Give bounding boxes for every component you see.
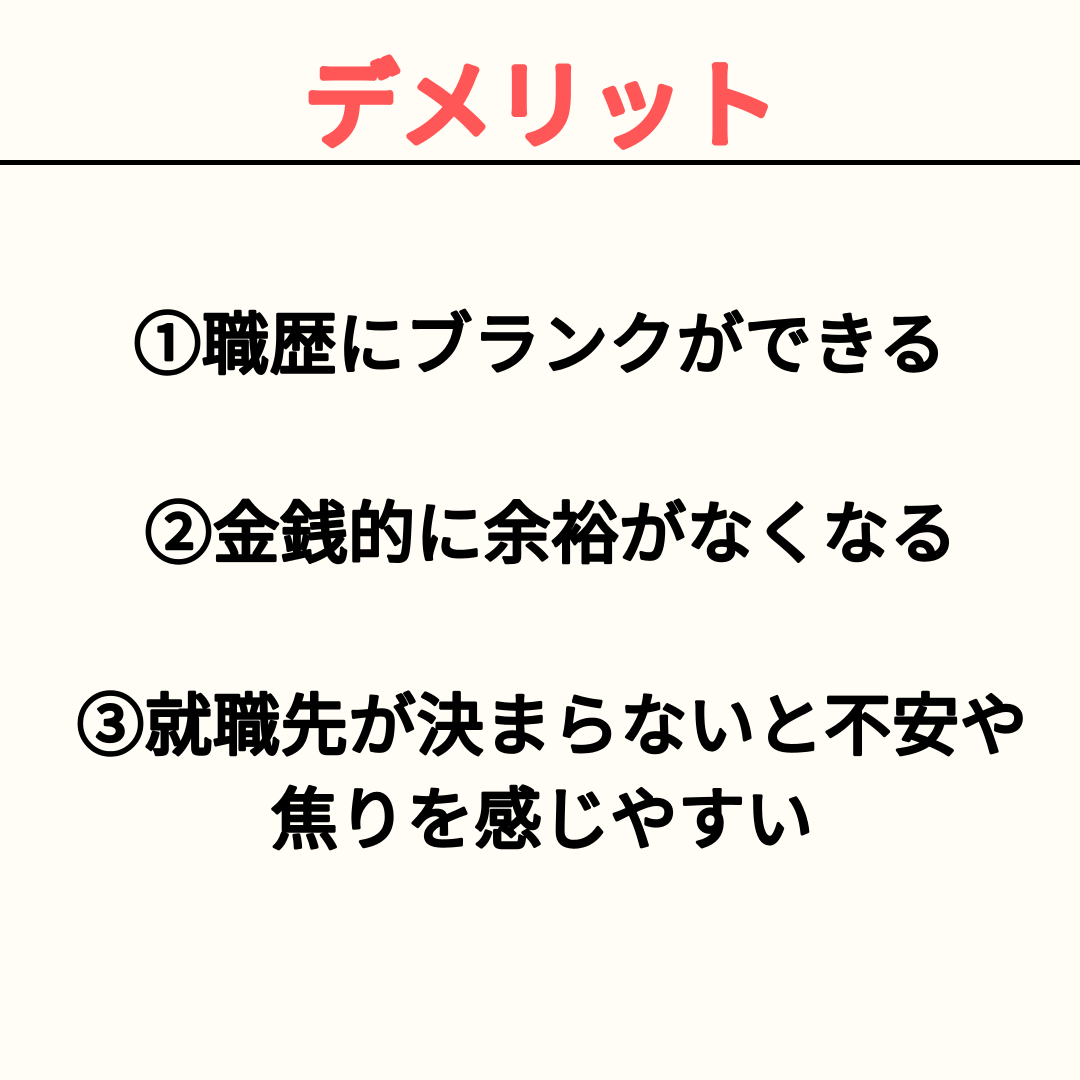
item 3: 焦りを感じやすい — [271, 783, 813, 858]
item 3: ③就職先が決まらないと不安や — [77, 689, 1027, 764]
item 1: ①職歴にブランクができる — [134, 308, 946, 383]
item 3 — [77, 689, 1027, 858]
divider line — [0, 160, 1080, 165]
title: デメリット — [304, 54, 779, 160]
item 2: ②金銭的に余裕がなくなる — [145, 497, 957, 572]
